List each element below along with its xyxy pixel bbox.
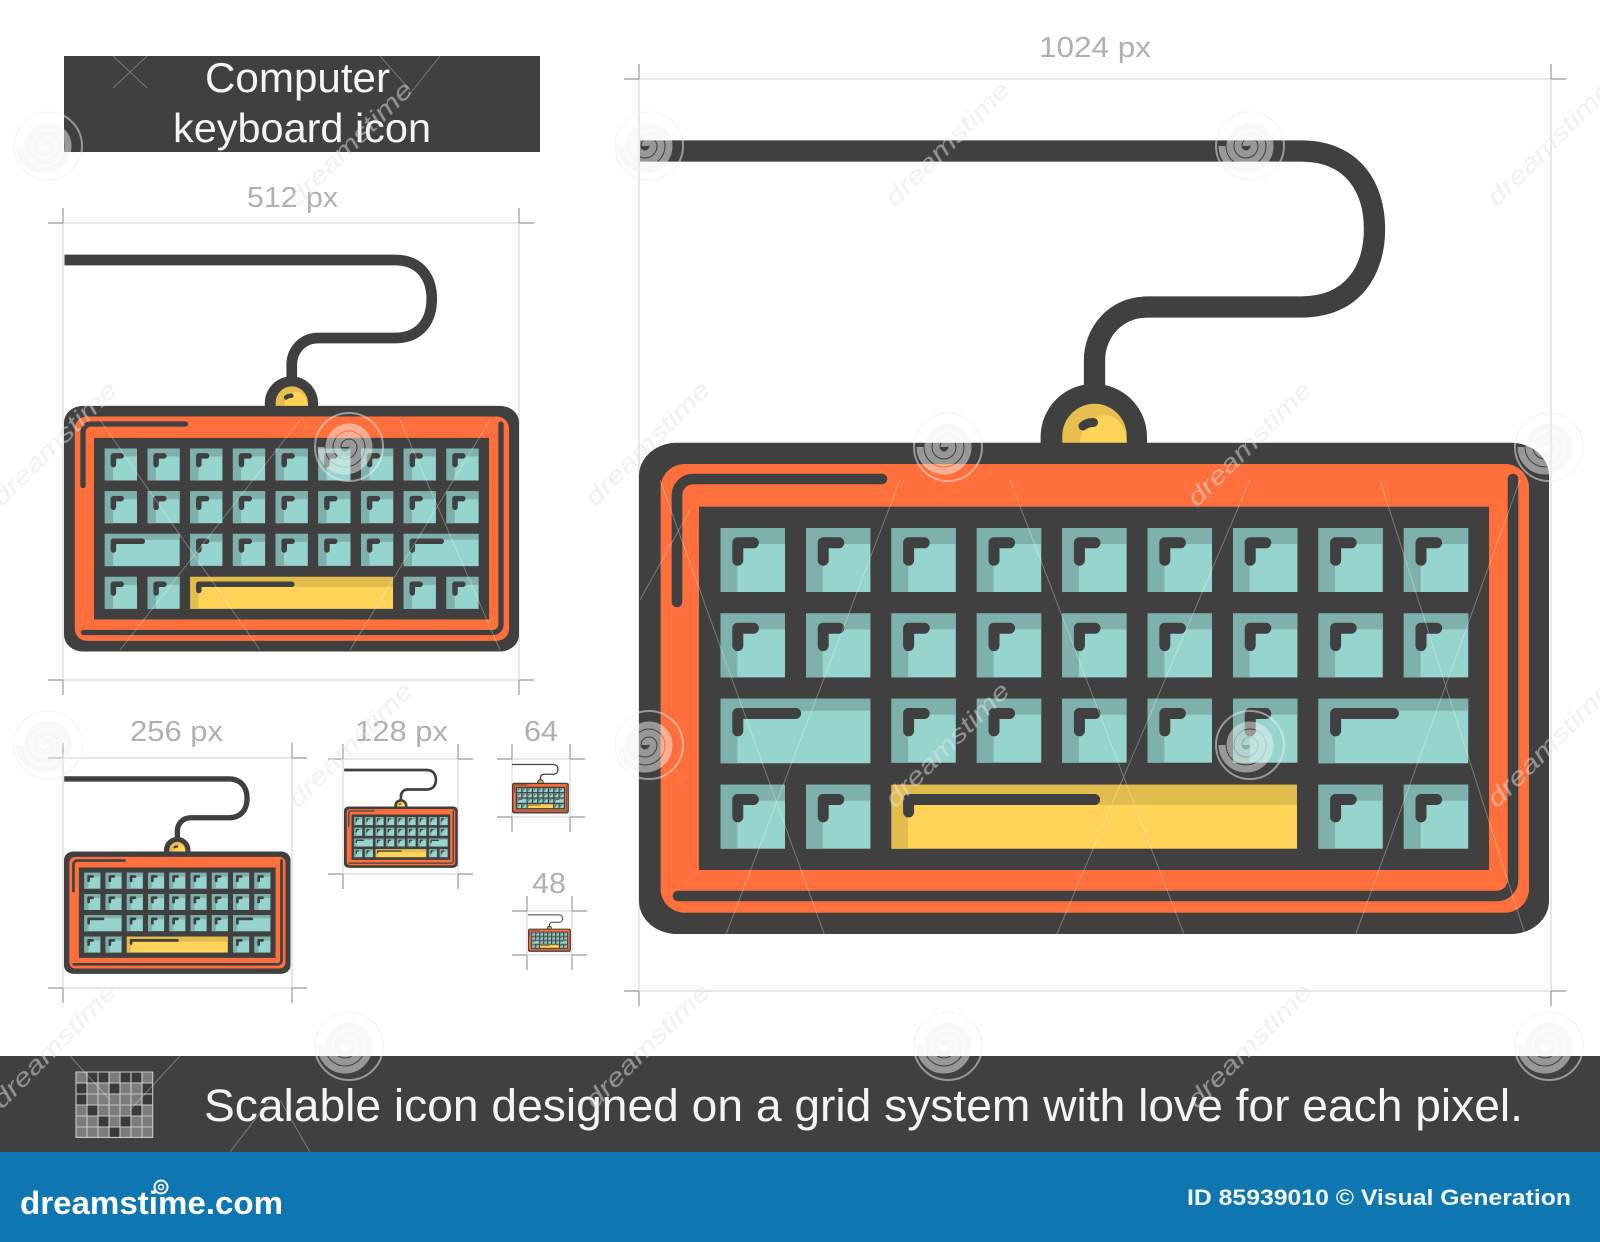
watermark: dreamstime text: dreamstime	[1481, 677, 1600, 813]
watermark: dreamstime text: dreamstime	[282, 76, 419, 212]
watermark: dreamstime text: dreamstime	[1481, 76, 1600, 212]
label: 64: 64	[524, 716, 558, 748]
size preview: 64 px	[497, 716, 585, 832]
size preview: 128 px	[328, 716, 473, 889]
label: 1024 px: 1024 px	[1039, 32, 1152, 64]
watermark: dreamstime text: dreamstime	[282, 677, 419, 813]
title banner	[64, 54, 540, 152]
icon: keyboard 256	[64, 779, 291, 974]
icon: pixel grid with heart	[76, 1072, 153, 1137]
label: 256 px: 256 px	[130, 716, 224, 748]
label: 48: 48	[532, 868, 566, 900]
footer bar: source credit	[0, 1152, 1600, 1242]
icon: keyboard 64	[512, 764, 569, 813]
icon: keyboard 128	[344, 770, 458, 868]
watermark: dreamstime text: dreamstime	[579, 376, 716, 512]
watermark: dreamstime text: dreamstime	[1181, 376, 1318, 512]
image id and author: ID 85939010 © Visual Generation	[1187, 1185, 1571, 1210]
watermark: dreamstime text: dreamstime	[1181, 978, 1318, 1114]
watermark: swirl logos	[14, 112, 1583, 1080]
icon: keyboard 1024	[639, 151, 1549, 934]
watermark: dreamstime text: dreamstime	[579, 978, 716, 1114]
icon: keyboard 48	[528, 915, 571, 952]
footer banner: grid system	[0, 1056, 1600, 1152]
title text line 2: keyboard icon	[173, 105, 431, 151]
title text line 1: Computer	[205, 54, 390, 101]
size preview: 256 px	[48, 716, 307, 1003]
logo: dreamstime.com: dreamstime.com	[20, 1185, 283, 1221]
icon: keyboard 512	[64, 260, 519, 652]
label: 128 px: 128 px	[355, 716, 449, 748]
tagline: Scalable icon designed on a grid system with love for each pixel.	[204, 1080, 1523, 1131]
label: 512 px: 512 px	[247, 182, 339, 214]
watermark: dreamstime text: dreamstime	[879, 677, 1016, 813]
watermark: dreamstime text: dreamstime	[879, 76, 1016, 212]
size preview: 512 px	[48, 182, 534, 695]
size preview: 48 px	[512, 868, 587, 970]
